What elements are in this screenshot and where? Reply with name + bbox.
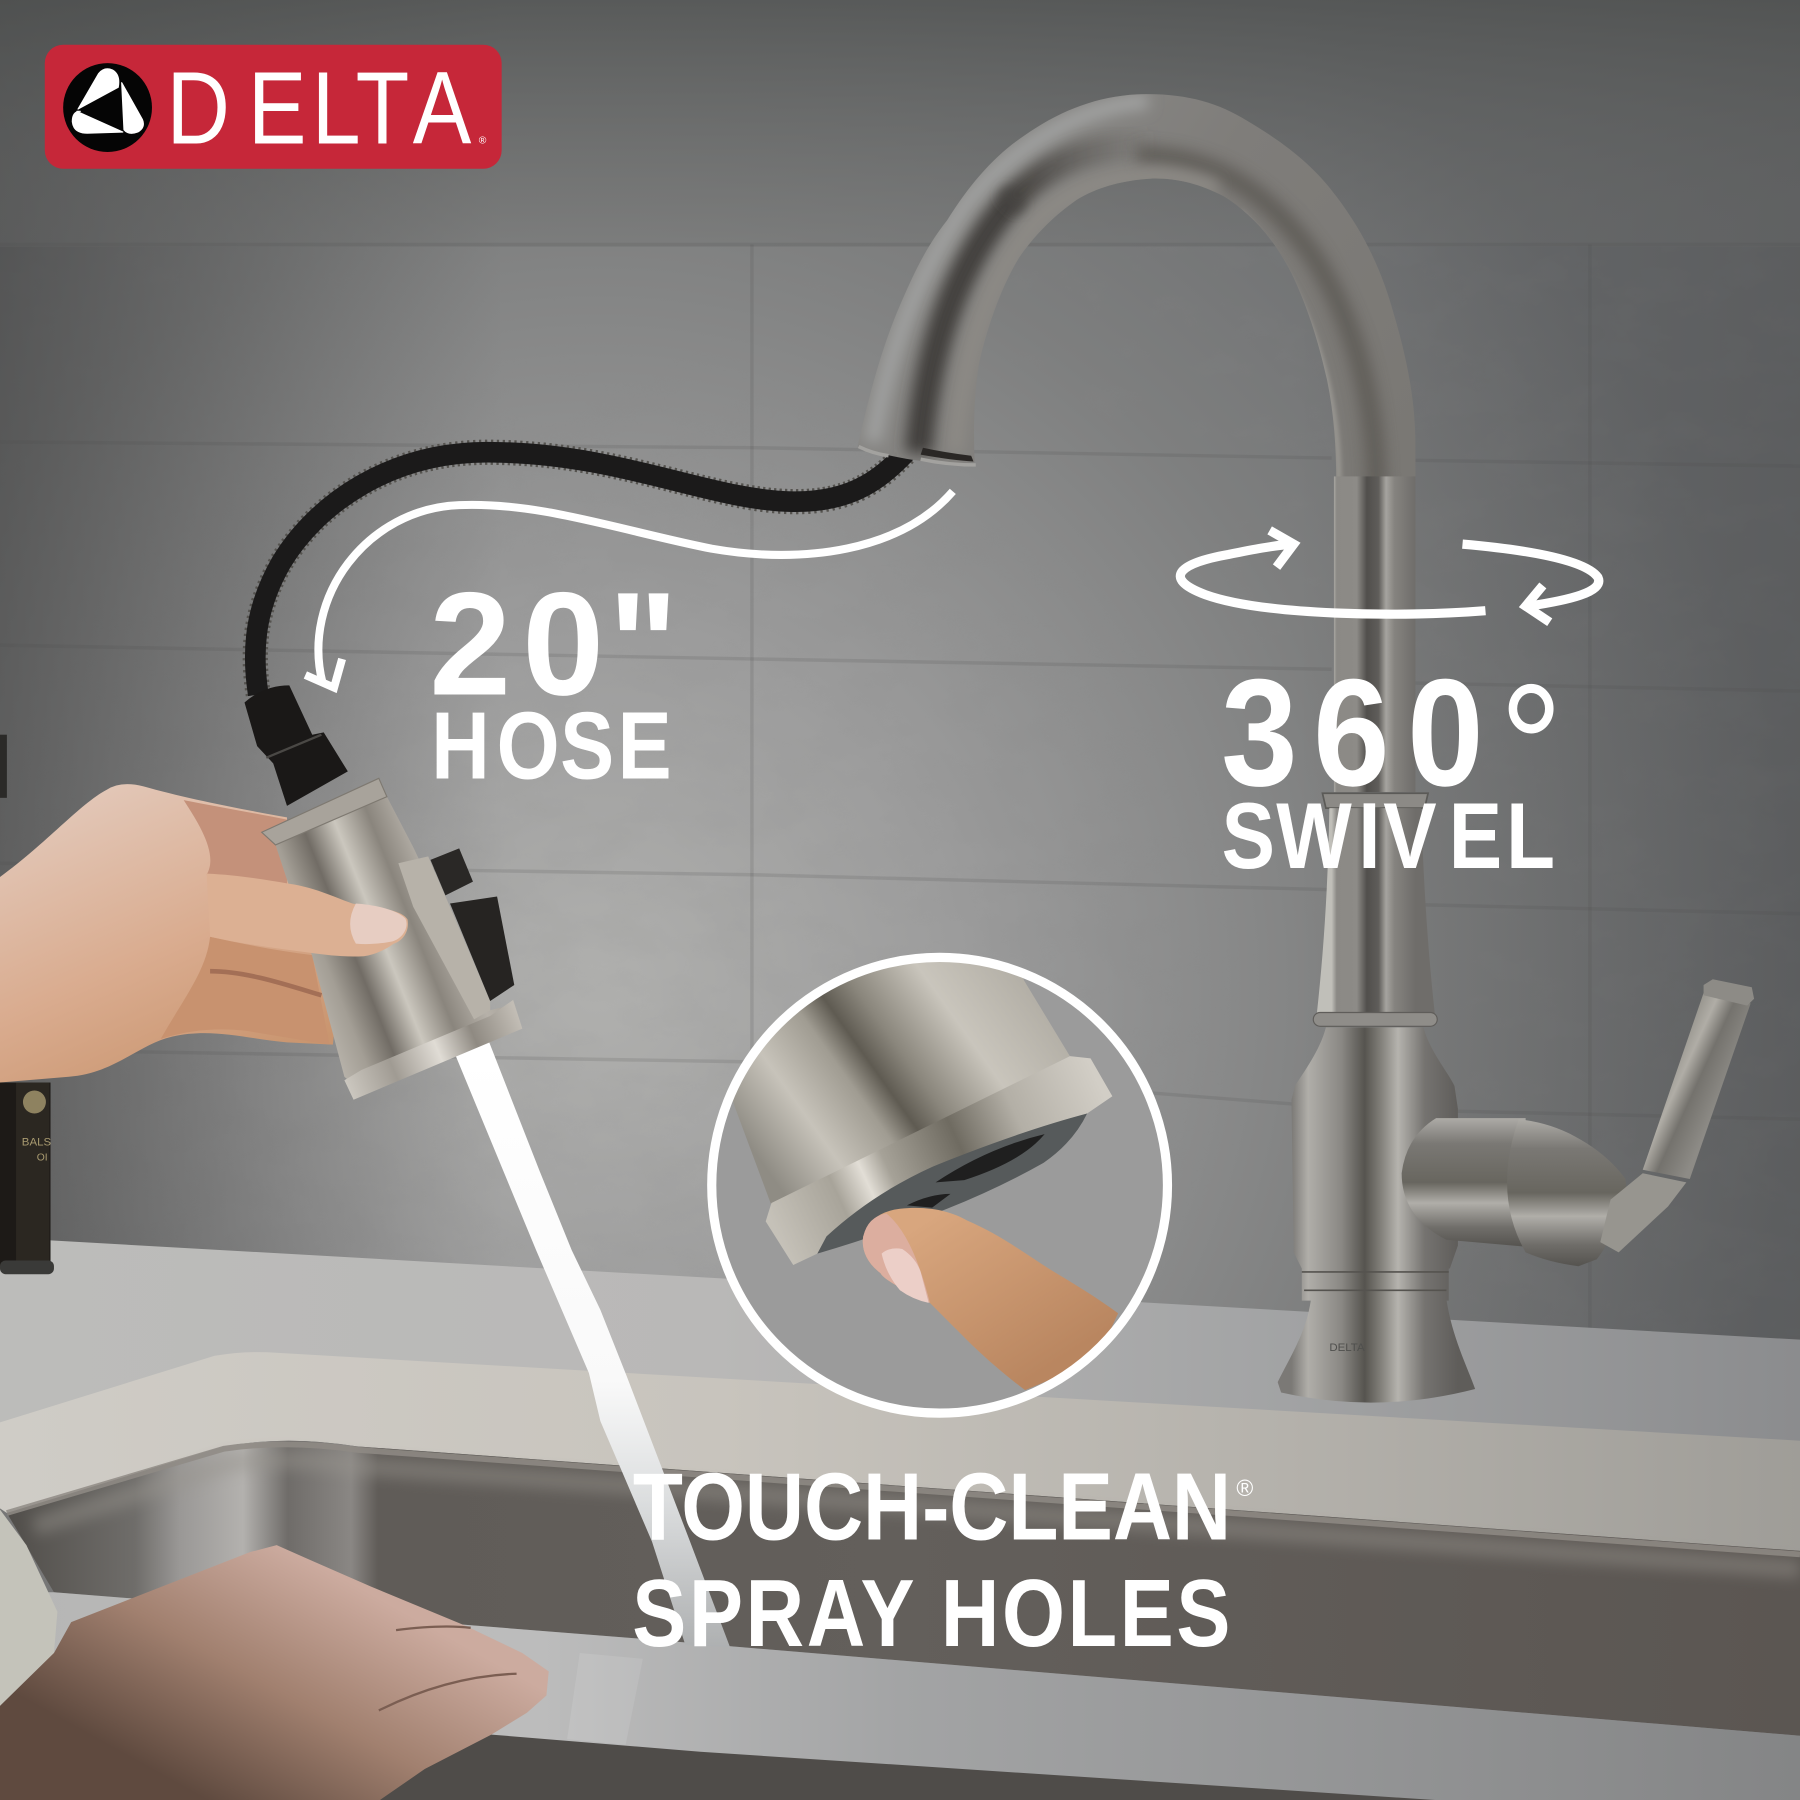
spray head body (276, 797, 513, 1085)
water stream (453, 1039, 730, 1745)
lower hand (0, 1545, 549, 1800)
index finger shadow (184, 800, 287, 884)
faucet tapered neck (1317, 808, 1435, 1015)
hand holding spray head (0, 784, 344, 1083)
sink upper glow (34, 1460, 1800, 1569)
nozzle body (733, 962, 1070, 1204)
pull-down hose (255, 445, 913, 695)
finger crease (210, 971, 321, 995)
faucet collar (1322, 793, 1428, 808)
heading: touch-clean: TOUCH-CLEAN (633, 1454, 1231, 1560)
background: tiled kitchen wall (0, 0, 1800, 1378)
top button (430, 848, 473, 895)
faucet base collar (1302, 1268, 1449, 1301)
nozzle rim (766, 1056, 1112, 1265)
spray head (207, 685, 522, 1100)
rocker button (450, 897, 514, 1001)
logo wordmark: DELTA (166, 51, 471, 166)
faucet barrel (1291, 1027, 1458, 1268)
finger pad (863, 1213, 930, 1303)
heading: hose label: HOSE (431, 692, 672, 799)
logo: Delta (45, 45, 502, 169)
fingertip (863, 1208, 1118, 1390)
inset: touch-clean spray holes (689, 941, 1167, 1413)
faucet base engraving: DELTA (1329, 1342, 1365, 1354)
registered mark: ® (1236, 1475, 1253, 1501)
sink rim highlight (7, 1444, 1800, 1554)
hose connector (245, 685, 348, 806)
lower counter ledge (0, 1592, 1800, 1800)
stainless steel sink basin (7, 1441, 1800, 1736)
olive oil bottle: OI (37, 1153, 48, 1164)
button side panel (398, 856, 490, 1019)
handle cone (1507, 1119, 1627, 1266)
faucet flared base (1278, 1299, 1475, 1403)
olive oil bottle: BALS (22, 1137, 51, 1149)
arrow: hose length (305, 491, 953, 688)
lower finger shadow (161, 937, 329, 1045)
handle neck (1600, 1173, 1686, 1252)
handle cap (1704, 979, 1754, 1006)
faucet (858, 94, 1754, 1403)
countertop surface (0, 1238, 1800, 1449)
spray head collar (262, 778, 387, 845)
faucet gooseneck arch (858, 94, 1415, 494)
fingernail (882, 1248, 929, 1303)
heading: swivel label: SWIVEL (1222, 783, 1555, 888)
heading: 20" hose number: 20" (429, 563, 678, 727)
heading: 360 degree number: 360 (1221, 647, 1484, 818)
lower counter shadow face (344, 1722, 1435, 1800)
arrow: swivel left (1180, 530, 1485, 614)
handle hub (1402, 1118, 1526, 1247)
faucet spout opening (921, 448, 973, 461)
handle lever (1643, 993, 1751, 1179)
faucet spout lip (859, 447, 976, 465)
heading: 360 degree number: ° (1499, 647, 1563, 846)
dark object at left edge (0, 735, 7, 798)
sleeve (0, 1510, 57, 1706)
spray head rim (344, 1000, 522, 1100)
thumbnail (350, 903, 407, 944)
thumb (207, 874, 408, 957)
olive oil bottle (0, 1083, 54, 1274)
logo mark (63, 63, 152, 152)
spray face (817, 1114, 1087, 1254)
back of hand and fingers (0, 784, 344, 1083)
logo registered mark: ® (479, 135, 487, 146)
countertop front edge (0, 1352, 1800, 1551)
faucet column (1334, 476, 1415, 792)
arrow: swivel right (1462, 544, 1599, 622)
heading: spray holes: SPRAY HOLES (632, 1560, 1230, 1667)
faucet ring (1313, 1012, 1437, 1026)
